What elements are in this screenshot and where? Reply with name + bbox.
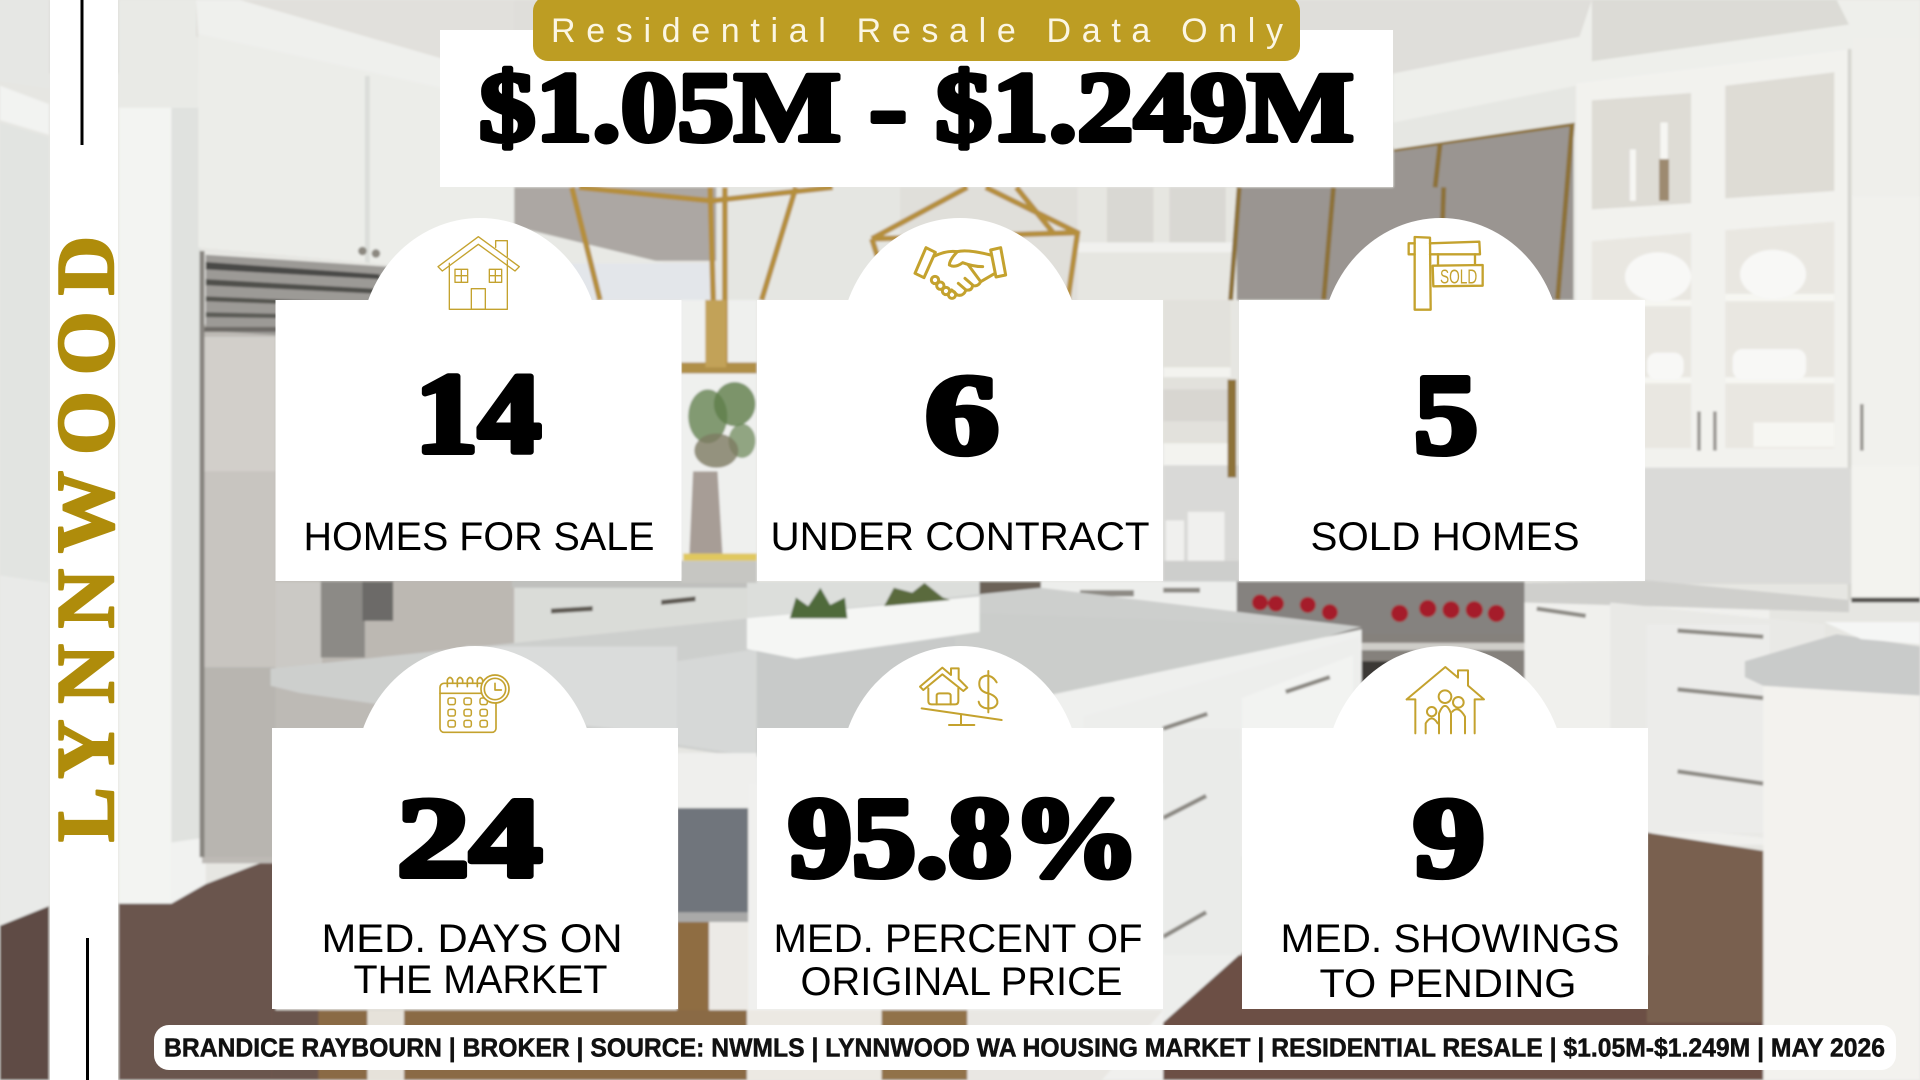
gold pill — [533, 0, 1300, 61]
label: THE MARKET — [354, 958, 608, 1002]
icon: family in a house — [1407, 667, 1484, 733]
card shape — [276, 218, 682, 581]
label — [322, 917, 622, 1002]
card shape — [1239, 218, 1645, 581]
card: median percent of original price — [757, 646, 1163, 1009]
value: 95.8% — [788, 774, 1140, 901]
footer bar — [154, 1025, 1896, 1070]
price range title: $1.05M - $1.249M — [479, 52, 1354, 162]
icon: house and dollar on a scale — [920, 668, 1002, 725]
value: 24 — [397, 774, 542, 901]
icon: sold sign — [1409, 237, 1483, 310]
value: 6 — [925, 351, 999, 478]
card shape — [757, 646, 1163, 1009]
card: under contract — [757, 218, 1163, 581]
label: MED. DAYS ON — [322, 917, 622, 961]
left vertical strip — [50, 0, 118, 1080]
value: 14 — [415, 350, 541, 477]
top black line — [80, 0, 84, 145]
label: SOLD HOMES — [1310, 515, 1580, 559]
card shape — [272, 646, 678, 1009]
card: sold homes — [1239, 218, 1645, 581]
source line: BRANDICE RAYBOURN | BROKER | SOURCE: NWMLS | LYNNWOOD WA HOUSING MARKET | RESIDENTIAL RESALE | $1.05M-$1.249M | MAY 2026 — [164, 1034, 1885, 1062]
card shape — [1242, 646, 1648, 1009]
city name: LYNNWOOD — [40, 236, 131, 842]
header panel — [440, 30, 1393, 187]
card shape — [757, 218, 1163, 581]
label: ORIGINAL PRICE — [800, 960, 1122, 1004]
bottom black line — [86, 938, 89, 1080]
label: UNDER CONTRACT — [770, 515, 1150, 559]
card: median showings to pending — [1242, 646, 1648, 1009]
label: HOMES FOR SALE — [304, 515, 654, 559]
icon: calendar with clock — [440, 675, 509, 732]
label — [1280, 917, 1620, 1006]
pill text: Residential Resale Data Only — [551, 12, 1283, 50]
icon: handshake — [915, 248, 1006, 298]
label — [774, 917, 1142, 1004]
value: 5 — [1414, 351, 1478, 478]
sign word: SOLD — [1440, 266, 1477, 288]
label: TO PENDING — [1320, 962, 1576, 1006]
card: median days on market — [272, 646, 678, 1009]
icon: house — [438, 237, 519, 309]
value: 9 — [1413, 774, 1485, 901]
label: MED. PERCENT OF — [774, 917, 1142, 961]
card: homes for sale — [276, 218, 682, 581]
label: MED. SHOWINGS — [1280, 917, 1620, 961]
